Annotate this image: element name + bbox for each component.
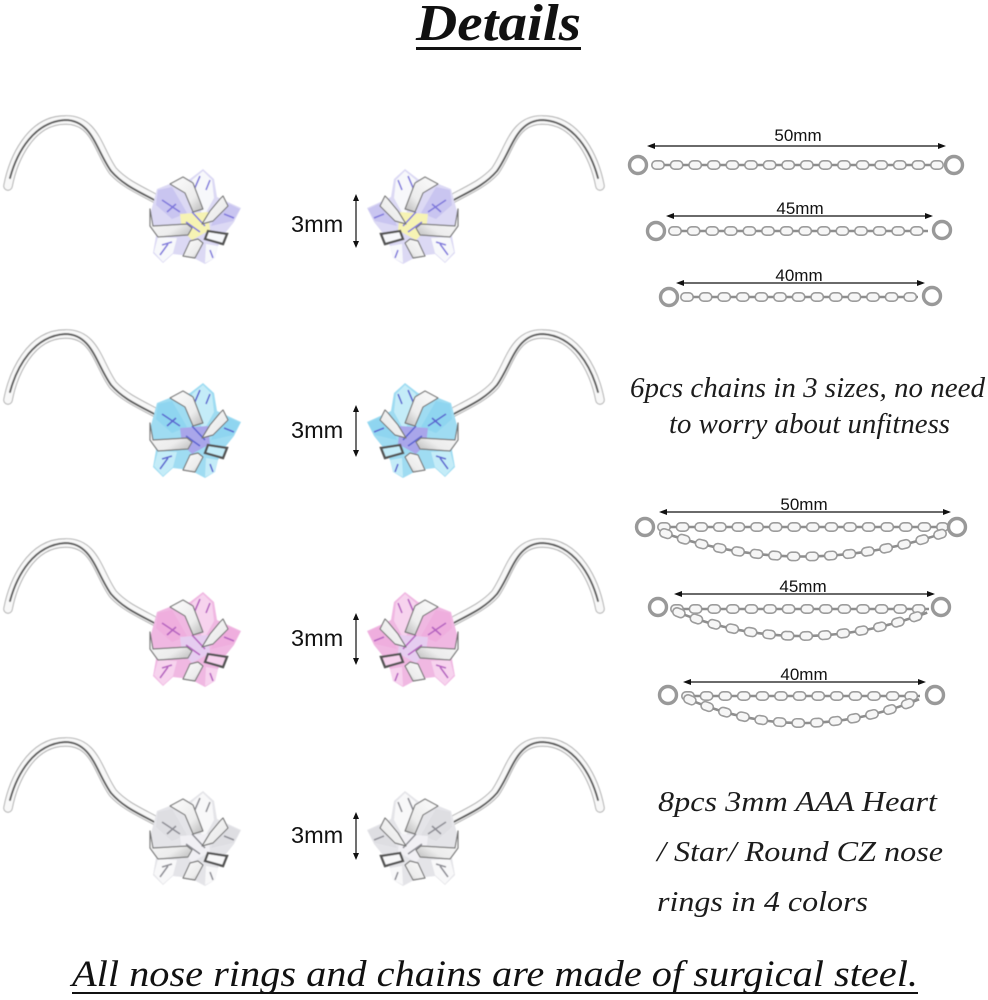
single chain 50mm bbox=[630, 126, 962, 174]
caption: nose rings: / Star/ Round CZ nose bbox=[655, 837, 943, 868]
caption: nose rings: 8pcs 3mm AAA Heart bbox=[658, 787, 938, 818]
nose ring row: aurora white bbox=[8, 120, 600, 264]
caption: chains bbox=[630, 373, 986, 440]
nose ring row: aqua bbox=[8, 334, 600, 478]
caption: nose rings: rings in 4 colors bbox=[657, 887, 868, 918]
left nose ring bbox=[8, 120, 241, 264]
single chain 40mm: 40mm bbox=[775, 266, 823, 285]
size label 3mm: 3mm bbox=[291, 211, 343, 237]
caption: chains: to worry about unfitness bbox=[669, 409, 950, 440]
right nose ring bbox=[367, 334, 600, 478]
double chain 45mm: 45mm bbox=[779, 577, 827, 596]
caption: nose rings bbox=[655, 787, 943, 918]
size label 3mm: 3mm bbox=[291, 417, 343, 443]
left nose ring bbox=[8, 334, 241, 478]
double chain 50mm bbox=[636, 495, 966, 556]
size label 3mm bbox=[291, 194, 359, 248]
left nose ring bbox=[8, 543, 241, 687]
double chain 40mm: 40mm bbox=[780, 665, 828, 684]
single chain 50mm: 50mm bbox=[774, 126, 822, 145]
footer note: All nose rings and chains are made of surgical steel. bbox=[69, 954, 918, 995]
size label 3mm bbox=[291, 812, 359, 860]
double chain 45mm bbox=[650, 577, 950, 636]
size label 3mm: 3mm bbox=[291, 625, 343, 651]
right nose ring bbox=[367, 120, 600, 264]
left nose ring bbox=[8, 742, 241, 886]
right nose ring bbox=[367, 742, 600, 886]
nose ring row: clear bbox=[8, 742, 600, 886]
right nose ring bbox=[367, 543, 600, 687]
size label 3mm bbox=[291, 405, 359, 457]
double chain 50mm: 50mm bbox=[780, 495, 828, 514]
size label 3mm bbox=[291, 613, 359, 665]
single chain 45mm: 45mm bbox=[776, 199, 824, 218]
caption: chains: 6pcs chains in 3 sizes, no need bbox=[630, 373, 986, 404]
double chain 40mm bbox=[660, 665, 944, 723]
single chain 40mm bbox=[660, 266, 940, 306]
nose ring row: pink bbox=[8, 543, 600, 687]
single chain 45mm bbox=[648, 199, 950, 240]
size label 3mm: 3mm bbox=[291, 822, 343, 848]
